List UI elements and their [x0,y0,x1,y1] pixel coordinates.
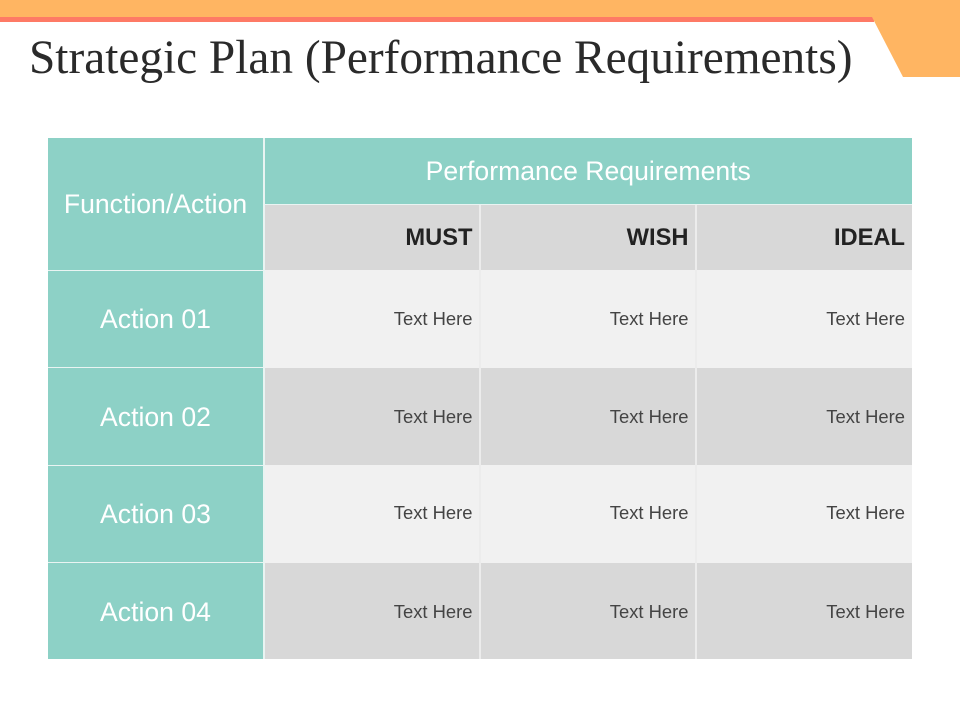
cell: Text Here [610,502,688,523]
cell [481,270,695,368]
header: function/action: Function/Action [64,189,247,219]
cell [481,465,695,562]
cell: Text Here [394,308,472,329]
cell [697,270,912,368]
column: must: MUST [405,224,472,250]
cell [264,368,479,465]
column: ideal: IDEAL [834,224,905,250]
header: performance requirements: Performance Requirements [426,156,751,186]
row label: action 03: Action 03 [100,499,211,529]
cell: Text Here [826,502,905,523]
cell: Text Here [826,308,905,329]
row label: action 03 [48,466,263,562]
table [48,138,912,659]
row label: action 04: Action 04 [100,596,211,626]
cell [481,562,695,659]
cell [481,368,695,465]
cell [264,562,479,659]
header: performance requirements [264,138,912,204]
header band [0,0,960,77]
row label: action 04 [48,563,263,659]
row label: action 01: Action 01 [100,304,211,334]
cell: Text Here [826,600,905,622]
cell [697,368,912,465]
cell [697,465,912,562]
column: wish [481,204,695,270]
cell: Text Here [394,406,472,426]
cell: Text Here [394,600,472,622]
cell [697,562,912,659]
column: must [264,204,479,270]
cell: Text Here [610,600,688,622]
title: Strategic Plan (Performance Requirements) [29,32,852,84]
row label: action 02 [48,368,263,464]
column: wish: WISH [627,224,688,250]
cell: Text Here [394,502,472,523]
cell: Text Here [610,308,688,329]
header: function/action [48,138,263,270]
row label: action 02: Action 02 [100,402,211,432]
cell: Text Here [826,406,905,426]
cell [264,465,479,562]
cell area backing [265,205,912,659]
cell: Text Here [610,406,688,426]
cell [264,270,479,368]
row label: action 01 [48,270,263,367]
column: ideal [697,204,912,270]
